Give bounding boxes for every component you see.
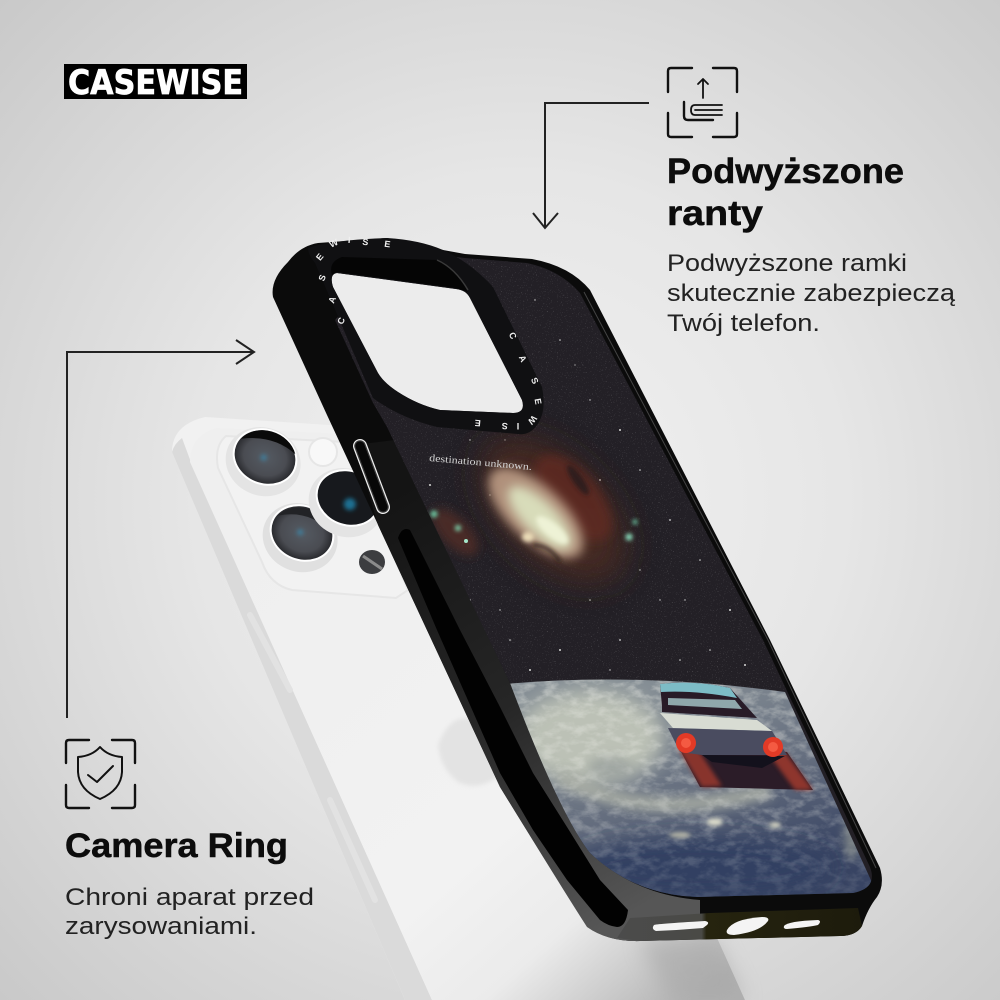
car — [660, 683, 813, 790]
icon: raised edges — [668, 68, 737, 137]
arrow: top — [533, 103, 649, 228]
side rim — [355, 440, 700, 941]
sensor — [359, 550, 385, 574]
ring text: E — [474, 418, 481, 428]
tail light left — [676, 733, 696, 753]
case silhouette — [273, 238, 882, 941]
lens: bottom — [252, 492, 348, 583]
car body — [668, 728, 787, 755]
camera plateau — [217, 436, 408, 598]
ring inner lip — [331, 257, 468, 292]
ring text: E — [314, 252, 325, 263]
ring text — [314, 235, 543, 431]
side slot — [398, 529, 628, 927]
text: Camera Ring description: Chroni aparat przed — [65, 884, 314, 911]
ring text: W — [328, 237, 340, 250]
text: Podwyższone description: Twój telefon. — [667, 310, 820, 337]
heading: Podwyższone ranty: Podwyższone — [667, 152, 904, 191]
star dust — [330, 240, 810, 690]
earth — [510, 680, 872, 897]
back artwork — [330, 240, 890, 910]
phone rim — [172, 417, 745, 1000]
flash — [309, 438, 337, 466]
ring text: S — [501, 421, 508, 431]
side buttons — [250, 615, 290, 690]
ring text: A — [517, 354, 529, 364]
car window — [668, 698, 742, 709]
car trunk — [660, 713, 772, 731]
icon: shield — [66, 740, 135, 808]
heading: Podwyższone ranty: ranty — [667, 194, 764, 233]
text: Camera Ring description: zarysowaniami. — [65, 913, 257, 940]
ring text: W — [525, 413, 539, 427]
car cabin — [660, 683, 757, 718]
green nebula — [428, 506, 640, 558]
port: speaker right — [784, 920, 820, 929]
tagline: destination unknown. — [429, 453, 532, 473]
apple logo — [438, 718, 500, 786]
heading: Podwyższone ranty — [667, 152, 904, 233]
light trail right — [767, 752, 813, 790]
stars — [429, 299, 746, 671]
port: speaker left — [653, 921, 708, 931]
phone body — [190, 428, 745, 1000]
ring shell — [308, 238, 544, 434]
ring text: S — [529, 376, 541, 386]
arrow: left — [67, 340, 254, 718]
tail light right — [763, 737, 783, 757]
ring text: A — [326, 295, 338, 305]
text: Podwyższone description: skutecznie zabezpieczą — [667, 280, 955, 307]
logo: CASEWISE — [68, 63, 243, 103]
camera ring — [308, 235, 544, 434]
light trail left — [678, 748, 722, 787]
lens: right — [298, 457, 394, 548]
ring text: C — [507, 331, 519, 341]
ring highlight — [437, 260, 468, 290]
white phone — [172, 416, 745, 1000]
ring text: I — [517, 421, 519, 431]
ring text: E — [533, 398, 543, 405]
space background — [330, 240, 890, 900]
car roof — [660, 683, 737, 698]
ring text: S — [316, 273, 328, 283]
lens: top — [215, 416, 311, 507]
side button — [360, 446, 383, 507]
nebula — [464, 424, 642, 601]
text: Camera Ring description — [65, 884, 314, 940]
heading: Camera Ring: Camera Ring — [65, 827, 288, 865]
ring text: S — [362, 237, 369, 247]
ring text: I — [348, 235, 351, 245]
ring text: C — [335, 316, 347, 326]
text: Podwyższone description — [667, 250, 955, 337]
shadow on phone — [640, 940, 745, 1000]
black case — [273, 238, 882, 941]
text: Podwyższone description: Podwyższone ramki — [667, 250, 907, 277]
bottom strip — [617, 908, 862, 941]
camera window — [332, 273, 523, 413]
ring text: E — [384, 239, 391, 249]
right glossy edge — [584, 292, 876, 868]
car shadow — [681, 752, 813, 790]
port: charge — [727, 917, 768, 935]
